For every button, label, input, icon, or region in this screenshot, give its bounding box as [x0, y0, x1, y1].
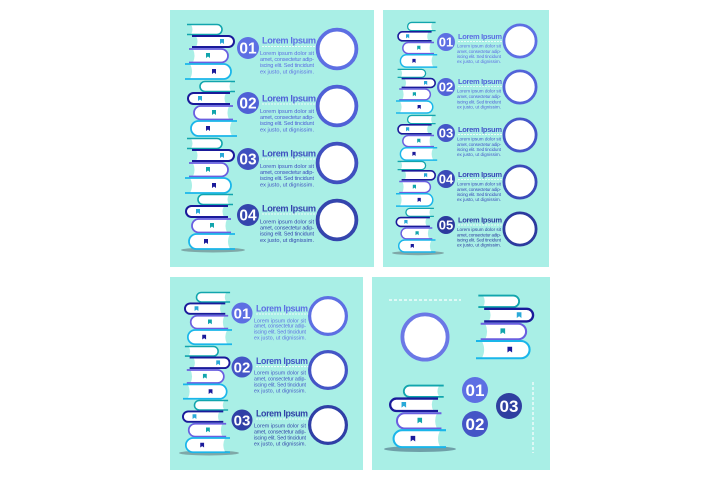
step 01 — [437, 25, 536, 64]
panel: three-step layout — [170, 277, 363, 470]
step 04: iscing elit. Sed tincidunt — [457, 192, 502, 197]
icon: small stack of books, top right — [476, 296, 533, 358]
step 02 — [237, 87, 356, 134]
step 02: Lorem ipsum dolor sit — [254, 370, 307, 376]
step 02: 02 — [234, 359, 250, 376]
step 03: ex justo, ut dignissim. — [254, 441, 306, 447]
step 04: ex justo, ut dignissim. — [260, 238, 314, 244]
step 04: amet, consectetur adip- — [457, 187, 501, 192]
step 03: 03 — [239, 151, 257, 168]
step 03: Lorem ipsum dolor sit — [254, 423, 307, 429]
step 02: ex justo, ut dignissim. — [254, 388, 306, 394]
panel: five-step layout — [383, 10, 549, 267]
step 01: amet, consectetur adip- — [457, 49, 501, 54]
icon: book stack shadow — [392, 251, 444, 255]
step 04: 04 — [239, 207, 257, 224]
icon: book stack shadow — [181, 248, 245, 252]
step 03: iscing elit. Sed tincidunt — [457, 147, 502, 152]
step 01 — [232, 298, 346, 342]
step 02 — [232, 352, 346, 394]
step 01: Lorem ipsum dolor sit — [260, 51, 314, 57]
icon: tall stack of books — [396, 22, 437, 252]
step 03 — [237, 144, 356, 188]
step 04: Lorem Ipsum — [262, 204, 316, 214]
step 02: iscing elit. Sed tincidunt — [254, 383, 307, 389]
step 01: iscing elit. Sed tincidunt — [457, 54, 502, 59]
step 01: ex justo, ut dignissim. — [457, 59, 501, 64]
step 01: ex justo, ut dignissim. — [260, 69, 314, 75]
icon: book stack shadow — [179, 450, 239, 456]
number badge 02 — [462, 411, 488, 437]
step 04: Lorem Ipsum — [458, 170, 502, 179]
step 04: iscing elit. Sed tincidunt — [260, 232, 314, 238]
step 02: Lorem Ipsum — [458, 77, 502, 86]
step 03: ex justo, ut dignissim. — [457, 152, 501, 157]
step 01: 01 — [234, 305, 250, 322]
step 02: amet, consectetur adip- — [457, 94, 501, 99]
step 02: 02 — [439, 80, 453, 95]
step 03 — [437, 119, 536, 157]
step 05: amet, consectetur adip- — [457, 232, 501, 237]
step 01: Lorem ipsum dolor sit — [254, 318, 307, 324]
icon: book stack shadow — [384, 446, 456, 452]
step 01: iscing elit. Sed tincidunt — [260, 63, 314, 69]
step 02: iscing elit. Sed tincidunt — [457, 99, 502, 104]
step 04: Lorem ipsum dolor sit — [260, 220, 314, 226]
step 03 — [232, 407, 346, 447]
step 01: amet, consectetur adip- — [260, 57, 314, 63]
step 02: ex justo, ut dignissim. — [457, 104, 501, 109]
step 02 — [437, 71, 536, 109]
step 03: iscing elit. Sed tincidunt — [260, 176, 314, 182]
step 02: iscing elit. Sed tincidunt — [260, 121, 314, 127]
step 02: Lorem Ipsum — [256, 356, 308, 366]
step 01: Lorem ipsum dolor sit — [457, 44, 502, 48]
step 04 — [437, 166, 536, 202]
step 01: Lorem Ipsum — [458, 32, 502, 41]
step 02: Lorem Ipsum — [262, 94, 316, 104]
step 02: Lorem ipsum dolor sit — [260, 109, 314, 115]
step 03: Lorem Ipsum — [262, 148, 316, 158]
step 03: iscing elit. Sed tincidunt — [254, 435, 307, 441]
icon: tall stack of books — [183, 292, 232, 452]
step 04: amet, consectetur adip- — [260, 226, 314, 232]
number badge 03: 03 — [500, 397, 518, 416]
step 05: Lorem Ipsum — [458, 215, 502, 224]
step 02: ex justo, ut dignissim. — [260, 128, 314, 134]
step 03: 03 — [234, 412, 250, 429]
step 01: amet, consectetur adip- — [254, 324, 306, 330]
step 01: ex justo, ut dignissim. — [254, 336, 306, 342]
step 05: ex justo, ut dignissim. — [457, 243, 501, 248]
step 01: iscing elit. Sed tincidunt — [254, 330, 307, 336]
number badge 03 — [496, 393, 522, 419]
step 03: amet, consectetur adip- — [457, 142, 501, 147]
step 03: amet, consectetur adip- — [260, 170, 314, 176]
icon: tall stack of books — [185, 24, 237, 249]
step 04: Lorem ipsum dolor sit — [457, 182, 502, 186]
step 03: Lorem Ipsum — [458, 125, 502, 134]
number badge 02: 02 — [466, 415, 484, 434]
step 04: ex justo, ut dignissim. — [457, 197, 501, 202]
step 03: Lorem ipsum dolor sit — [457, 136, 502, 142]
step 03: 03 — [439, 126, 453, 141]
step 04 — [237, 201, 356, 244]
step 01: Lorem Ipsum — [256, 303, 308, 313]
step 01: Lorem Ipsum — [262, 36, 316, 46]
step 01 — [237, 30, 356, 75]
step 02: 02 — [239, 95, 257, 112]
step 02: Lorem ipsum dolor sit — [457, 89, 502, 94]
icon: small stack of books, bottom left — [390, 386, 446, 447]
step 03: Lorem Ipsum — [256, 408, 308, 418]
step 01: 01 — [439, 35, 453, 50]
step 03: ex justo, ut dignissim. — [260, 182, 314, 188]
number badge 01 — [462, 377, 488, 403]
step 03: amet, consectetur adip- — [254, 429, 306, 435]
number badge 01: 01 — [466, 381, 484, 400]
step 01: 01 — [239, 40, 257, 57]
step 05: iscing elit. Sed tincidunt — [457, 238, 502, 243]
panel: four-step layout — [170, 10, 374, 267]
step 04: 04 — [439, 172, 454, 187]
step 05: 05 — [439, 218, 453, 233]
step 05 — [437, 213, 536, 248]
photo circle — [402, 314, 448, 360]
step 02: amet, consectetur adip- — [254, 377, 306, 383]
step 02: amet, consectetur adip- — [260, 115, 314, 121]
step 05: Lorem ipsum dolor sit — [457, 227, 502, 232]
step 03: Lorem ipsum dolor sit — [260, 164, 314, 170]
panel: design elements — [372, 277, 550, 470]
